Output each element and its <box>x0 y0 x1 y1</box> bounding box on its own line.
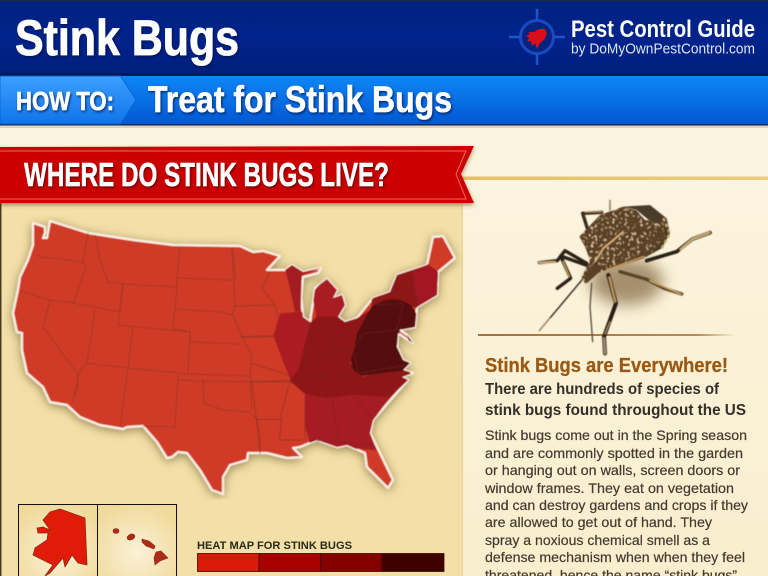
body text: and can destroy gardens and crops if they <box>485 497 748 513</box>
legend bar <box>198 554 444 572</box>
body text: window frames. They eat on vegetation <box>484 480 734 496</box>
banner: where do stink bugs live <box>0 146 474 203</box>
icon: Alaska <box>33 509 87 576</box>
panel: map background <box>0 190 463 576</box>
body text: defense mechanism when when they feel <box>485 549 745 565</box>
heading: HOW TO:: HOW TO: <box>16 86 114 116</box>
inset: Alaska and Hawaii <box>18 504 176 576</box>
how-to tab <box>0 76 136 124</box>
lead text: stink bugs found throughout the US <box>485 402 746 419</box>
bug back edge <box>623 205 670 258</box>
text block: stink bugs are everywhere <box>484 354 748 576</box>
body text: and are commonly spotted in the garden <box>485 445 743 461</box>
body text: Stink bugs come out in the Spring season <box>485 427 747 443</box>
logo: crosshair with red bug <box>509 9 565 65</box>
logo text: by DoMyOwnPestControl.com: by DoMyOwnPestControl.com <box>571 42 755 58</box>
lead text <box>485 381 746 419</box>
body text: are allowed to get out of hand. They <box>485 514 712 530</box>
body text: spray a noxious chemical smell as a <box>485 532 710 548</box>
antennae <box>539 278 583 331</box>
title: Stink Bugs: Stink Bugs <box>15 10 239 66</box>
body text: or hanging out on walls, screen doors or <box>485 462 740 478</box>
icon: Hawaii <box>113 528 168 565</box>
header bar <box>0 0 768 76</box>
lead text: There are hundreds of species of <box>485 381 720 398</box>
divider: gold rule <box>462 176 768 180</box>
rule under the bug <box>478 334 736 336</box>
heat zones <box>273 263 442 450</box>
legend title: HEAT MAP FOR STINK BUGS <box>197 540 352 552</box>
legs <box>583 212 602 228</box>
map base <box>13 221 455 494</box>
how-to band <box>0 76 768 128</box>
banner heading: WHERE DO STINK BUGS LIVE? <box>24 156 389 193</box>
body text <box>484 427 748 576</box>
icon: stink bug <box>539 201 710 353</box>
subheading: Stink Bugs are Everywhere! <box>485 354 728 377</box>
state lines: east <box>240 272 418 452</box>
legend: heat map <box>197 540 444 572</box>
state lines: west <box>20 233 290 454</box>
map: US heat map <box>13 221 455 494</box>
heading: Treat for Stink Bugs: Treat for Stink Bugs <box>148 79 452 120</box>
bug body <box>579 207 665 283</box>
